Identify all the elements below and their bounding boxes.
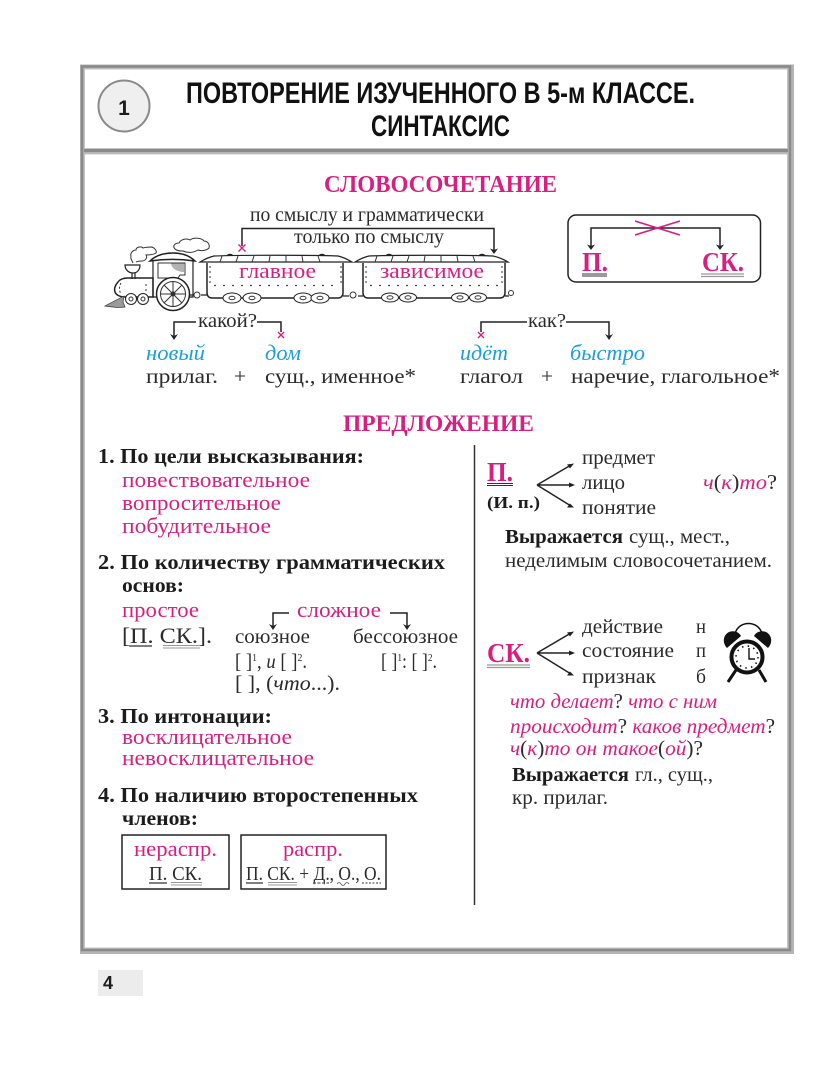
panel: subject: ч(к)то?: [703, 470, 777, 494]
header badge: lesson number: [98, 80, 150, 132]
panel: predicate: признак: [582, 666, 656, 688]
example: идёт быстро: идёт: [460, 340, 508, 365]
example: новый дом: прилаг.: [146, 364, 218, 388]
heading: словосочетание: СЛОВОСОЧЕТАНИЕ: [324, 172, 557, 198]
example: идёт быстро: наречие, глагольное*: [571, 364, 780, 388]
panel: subject: сущ., мест.,: [629, 526, 730, 548]
text block: 4 secondary members: членов:: [122, 806, 198, 830]
text block: 4 secondary members: 4. По наличию второстепенных: [98, 783, 418, 807]
panel: predicate: [487, 616, 775, 809]
text block: 2 number of grammatical bases: [ ], (что...).: [235, 671, 340, 695]
text block: 2 number of grammatical bases: основ:: [122, 573, 184, 597]
panel: predicate: б: [696, 666, 706, 688]
diagram: train with connection arrows: [105, 204, 514, 310]
heading: предложение: ПРЕДЛОЖЕНИЕ: [343, 411, 534, 436]
arrows: predicate meanings: [537, 632, 575, 676]
box: распространённое: распр.: [283, 836, 343, 861]
text block: 3 intonation: [98, 704, 314, 770]
example: новый дом: +: [234, 364, 246, 388]
text block: 2 number of grammatical bases: [ ]: [235, 649, 254, 673]
icon: locomotive: [105, 238, 209, 310]
column divider: [474, 445, 476, 905]
panel: subject-predicate not a phrase: П.: [582, 247, 608, 277]
title: СИНТАКСИС: [371, 110, 510, 143]
text block: 2 number of grammatical bases: 2: [428, 652, 433, 664]
icon: second carriage: [343, 254, 514, 302]
panel: subject-predicate not a phrase: [568, 215, 760, 282]
panel: subject: предмет: [582, 447, 655, 469]
text block: 1 purpose of statement: побудительное: [122, 513, 271, 538]
header badge: lesson number: 1: [118, 97, 130, 120]
text block: 2 number of grammatical bases: сложное: [297, 597, 381, 622]
text block: 2 number of grammatical bases: 2. По количеству грамматических: [98, 550, 445, 574]
icon: first carriage: [200, 254, 352, 303]
text block: 3 intonation: восклицательное: [122, 724, 292, 749]
text block: 1 purpose of statement: повествовательное: [122, 467, 310, 492]
example: новый дом: новый: [146, 340, 205, 365]
panel: predicate: состояние: [582, 640, 674, 662]
page number: 4: [103, 973, 113, 993]
panel: predicate: Выражается: [512, 764, 629, 786]
example: новый дом: дом: [265, 340, 301, 365]
panel: subject: П.: [487, 457, 513, 487]
text block: 1 purpose of statement: вопросительное: [122, 490, 281, 515]
panel: subject: [487, 447, 777, 572]
text block: 2 number of grammatical bases: [ ]: [381, 649, 400, 673]
panel: subject: неделимым словосочетанием.: [505, 550, 772, 572]
page frame: [80, 64, 794, 954]
text block: 2 number of grammatical bases: простое: [122, 597, 199, 622]
panel: predicate: действие: [582, 616, 663, 638]
text block: 2 number of grammatical bases: бессоюзное: [353, 626, 458, 648]
example: идёт быстро: глагол: [460, 364, 523, 388]
title: ПОВТОРЕНИЕ ИЗУЧЕННОГО В 5-м КЛАССЕ.: [186, 77, 695, 110]
box: распространённое: П. СК. + Д., О., О.: [246, 864, 381, 885]
text block: 2 number of grammatical bases: 1: [252, 652, 257, 664]
box: распространённое: [241, 835, 386, 889]
text block: 2 number of grammatical bases: 1: [397, 652, 402, 664]
box: нераспространённое: П. СК.: [149, 864, 202, 885]
panel: predicate: что делает? что с ним: [510, 689, 717, 713]
label: по смыслу и грамматически: по смыслу и грамматически: [250, 204, 484, 226]
text block: 1 purpose of statement: 1. По цели высказывания:: [98, 444, 364, 468]
text block: 2 number of grammatical bases: и [ ]: [266, 649, 300, 673]
arrows: subject meanings: [537, 464, 575, 508]
text block: 3 intonation: 3. По интонации:: [98, 704, 272, 728]
example: новый дом: [146, 310, 416, 388]
panel: predicate: п: [696, 640, 706, 662]
label: зависимое: зависимое: [380, 258, 484, 283]
panel: subject: Выражается: [505, 526, 623, 548]
title: [186, 77, 695, 143]
panel: predicate: происходит? каков предмет?: [510, 714, 775, 738]
text block: 2 number of grammatical bases: .: [433, 649, 437, 673]
text block: 2 number of grammatical bases: ,: [257, 649, 266, 673]
example: новый дом: сущ., именное*: [265, 364, 416, 388]
panel: subject: (И. п.): [487, 493, 540, 512]
panel: predicate: ч(к)то он такое(ой)?: [510, 736, 703, 760]
example: идёт быстро: как?: [528, 310, 566, 332]
text block: 1 purpose of statement: [98, 444, 364, 538]
text block: 2 number of grammatical bases: [98, 550, 458, 695]
example: новый дом: какой?: [198, 310, 257, 332]
panel: subject: лицо: [582, 472, 625, 494]
label: главное: главное: [239, 258, 316, 283]
panel: predicate: кр. прилаг.: [512, 787, 608, 809]
panel: subject: понятие: [582, 497, 656, 519]
text block: 3 intonation: невосклицательное: [122, 745, 314, 770]
arrow: main word to dependent word: [238, 228, 498, 254]
text block: 2 number of grammatical bases: :: [402, 649, 411, 673]
text block: 2 number of grammatical bases: 2: [297, 652, 302, 664]
panel: predicate: н: [696, 616, 706, 638]
label: только по смыслу: только по смыслу: [294, 226, 444, 248]
panel: predicate: СК.: [487, 638, 530, 668]
text block: 4 secondary members: [98, 783, 418, 889]
text block: 2 number of grammatical bases: союзное: [235, 626, 310, 648]
text block: 2 number of grammatical bases: [П. СК.].: [122, 623, 212, 648]
panel: subject-predicate not a phrase: СК.: [702, 247, 744, 277]
example: идёт быстро: [460, 310, 780, 388]
example: идёт быстро: +: [541, 364, 553, 388]
text block: 2 number of grammatical bases: .: [302, 649, 307, 673]
icon: alarm clock: [724, 624, 771, 682]
box: нераспространённое: нераспр.: [134, 836, 217, 861]
example: идёт быстро: быстро: [570, 340, 645, 365]
page number: [98, 970, 143, 996]
box: нераспространённое: [122, 835, 229, 889]
panel: predicate: гл., сущ.,: [635, 764, 713, 786]
text block: 2 number of grammatical bases: [ ]: [411, 649, 431, 673]
